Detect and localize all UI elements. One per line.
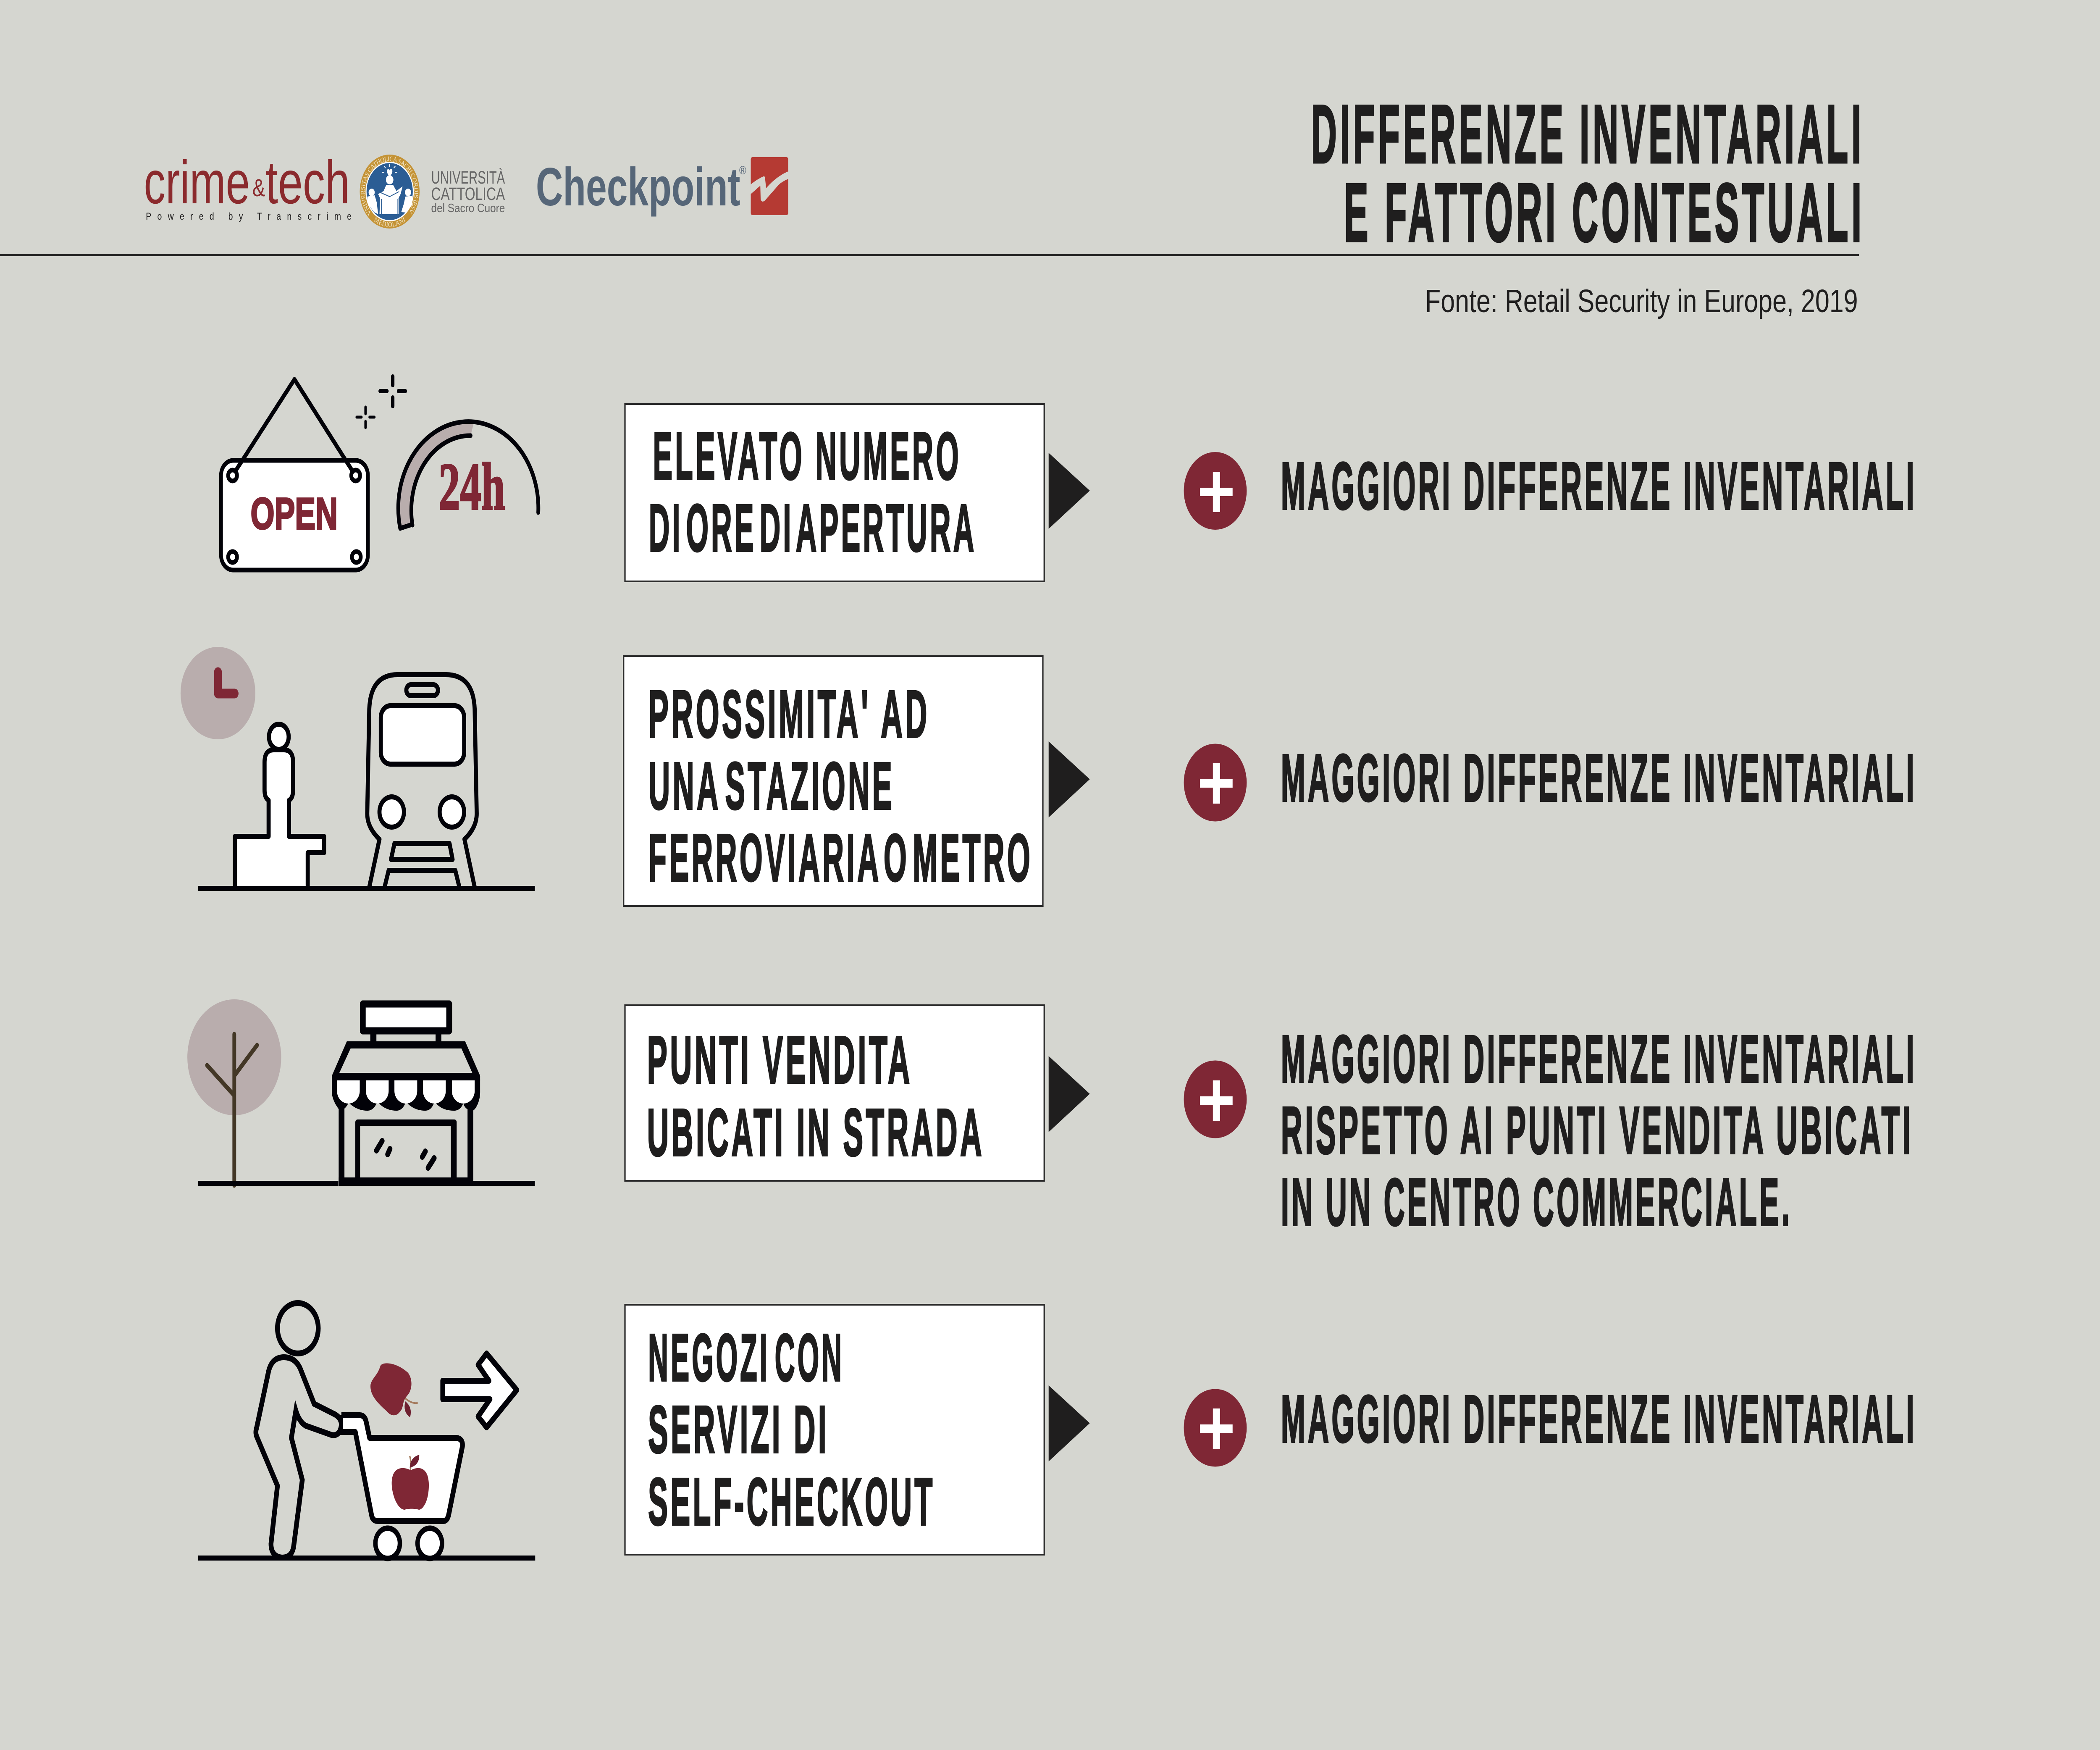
icon: shopper with cart <box>198 1303 535 1561</box>
effect text: IN UN CENTRO COMMERCIALE. <box>1281 1164 1792 1240</box>
factor box <box>624 656 1043 906</box>
factor box: DI ORE DI APERTURA <box>649 490 976 565</box>
source note: Fonte: Retail Security in Europe, 2019 <box>1425 283 1858 319</box>
factor box: SERVIZI DI <box>648 1392 829 1467</box>
plus icon <box>1184 1060 1247 1138</box>
logo: Università Cattolica: CATTOLICA <box>431 184 505 204</box>
effect text: RISPETTO AI PUNTI VENDITA UBICATI <box>1281 1093 1913 1168</box>
factor box: ELEVATO NUMERO <box>653 418 961 494</box>
effect text: MAGGIORI DIFFERENZE INVENTARIALI <box>1281 740 1917 815</box>
factor box <box>625 1305 1044 1555</box>
factor box <box>625 1005 1044 1181</box>
icon: tree and shop <box>187 999 535 1186</box>
row 3: street stores <box>187 999 1917 1240</box>
row 4: self-checkout <box>198 1303 1917 1561</box>
cart <box>340 1415 462 1558</box>
plus icon <box>1184 744 1247 822</box>
plus icon <box>1184 1389 1247 1467</box>
shopper <box>256 1303 341 1558</box>
effect text <box>1281 1021 1917 1240</box>
arrow <box>1049 1385 1090 1461</box>
arrow <box>1049 1056 1090 1132</box>
logo: crime&tech: crime <box>144 148 250 216</box>
icon: open sign and 24h: 24h <box>438 449 505 524</box>
apple in cart <box>392 1455 429 1510</box>
icon: person and train <box>181 647 535 891</box>
title: DIFFERENZE INVENTARIALI <box>1311 88 1864 180</box>
logo: Checkpoint: Checkpoint <box>536 157 740 217</box>
factor box: FERROVIARIA O METRO <box>648 820 1033 895</box>
plus icon <box>1184 452 1247 530</box>
header rule <box>0 254 1859 256</box>
row 2: railway proximity <box>181 647 1917 906</box>
arrow icon <box>443 1353 517 1427</box>
logo: crime&tech: & <box>252 174 265 202</box>
logo: crime&tech <box>144 148 352 222</box>
effect text: MAGGIORI DIFFERENZE INVENTARIALI <box>1281 1021 1917 1096</box>
logo: crime&tech: Powered by Transcrime <box>146 210 352 222</box>
factor box: PROSSIMITA' AD <box>648 676 930 752</box>
title: E FATTORI CONTESTUALI <box>1344 166 1865 259</box>
factor box: UBICATI IN STRADA <box>647 1095 984 1170</box>
clock <box>181 647 255 739</box>
falling apple <box>370 1363 417 1417</box>
row 1: opening hours <box>221 376 1917 581</box>
icon: open sign and 24h: OPEN <box>251 489 338 539</box>
arrow <box>1049 453 1090 529</box>
factor box: NEGOZI CON <box>648 1320 844 1395</box>
factor box: UNA STAZIONE <box>648 748 895 823</box>
logo: Università Cattolica: UNIVERSITÀ <box>431 168 505 188</box>
icon: open sign and 24h <box>221 376 538 570</box>
effect text: MAGGIORI DIFFERENZE INVENTARIALI <box>1281 448 1917 523</box>
effect text: MAGGIORI DIFFERENZE INVENTARIALI <box>1281 1381 1917 1456</box>
factor box: SELF-CHECKOUT <box>648 1464 935 1539</box>
title <box>1311 88 1865 259</box>
shop <box>332 1004 480 1186</box>
logo: Checkpoint: ® <box>739 164 746 177</box>
logo: Università Cattolica: del Sacro Cuore <box>431 201 505 215</box>
factor box: PUNTI VENDITA <box>647 1022 913 1097</box>
arrow <box>1049 741 1090 817</box>
logo: Università Cattolica <box>431 168 505 215</box>
logo: crime&tech: tech <box>265 148 350 216</box>
logo: university seal: VNIVERSITAS CATHOLICA SACRI CORDIS IESV <box>360 155 420 217</box>
factor box <box>625 404 1044 581</box>
logo: university seal: MEDIOLANI <box>373 216 407 229</box>
